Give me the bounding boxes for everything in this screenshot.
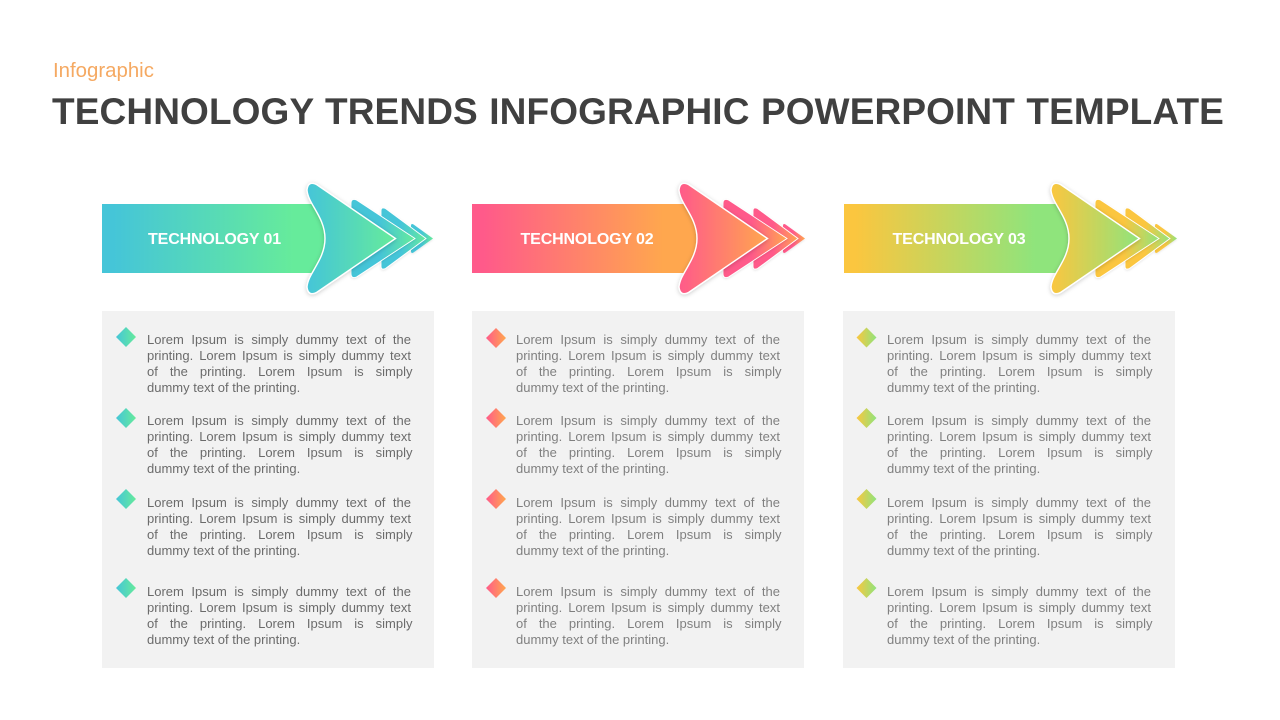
text: technology 03 item 4 [887,584,1152,647]
text: technology 01 item 2 [147,413,412,476]
eyebrow label: Infographic [53,60,154,82]
label: TECHNOLOGY 01 [148,231,281,248]
chevron 4 [411,224,433,253]
text: technology 02 item 4: Lorem Ipsum is simply dummy text of the [516,584,780,599]
arrow body [102,204,327,273]
text: technology 02 item 4 [516,584,782,647]
text: technology 03 item 2: of the printing. Lorem Ipsum is simply [887,445,1152,460]
chevrons and head [679,183,805,294]
text: technology 02 item 1: printing. Lorem Ipsum is simply dummy text [516,348,780,363]
text: technology 03 item 2: dummy text of the printing. [887,461,1040,476]
arrow body [844,204,1069,273]
text: technology 01 item 3: printing. Lorem Ipsum is simply dummy text [147,511,411,526]
label: TECHNOLOGY 02 [521,231,654,248]
text: technology 01 item 2: of the printing. Lorem Ipsum is simply [147,445,412,460]
text: technology 02 item 1: Lorem Ipsum is simply dummy text of the [516,332,780,347]
panel: technology 01 [102,311,434,668]
text: technology 01 item 4: printing. Lorem Ipsum is simply dummy text [147,600,411,615]
text: technology 01 item 4: of the printing. Lorem Ipsum is simply [147,616,412,631]
text: technology 02 item 2: Lorem Ipsum is simply dummy text of the [516,413,780,428]
text: technology 03 item 4: Lorem Ipsum is simply dummy text of the [887,584,1151,599]
chevrons and head [1051,183,1177,294]
diamond icons: technology 03 [856,328,876,598]
text: technology 02 item 2: dummy text of the printing. [516,461,669,476]
text: technology 02 item 3: of the printing. Lorem Ipsum is simply [516,527,782,542]
text: technology 01 item 3: dummy text of the printing. [147,543,300,558]
text: technology 03 item 3: dummy text of the printing. [887,543,1040,558]
text: technology 03 item 3: of the printing. Lorem Ipsum is simply [887,527,1152,542]
text: technology 01 item 1 [147,332,412,395]
text: technology 01 item 4 [147,584,412,647]
text: technology 03 item 1: of the printing. Lorem Ipsum is simply [887,364,1152,379]
text: technology 02 item 4: dummy text of the printing. [516,632,669,647]
text: technology 03 item 2 [887,413,1152,476]
text: technology 02 item 2: of the printing. Lorem Ipsum is simply [516,445,782,460]
diamond icons: technology 01 [116,327,136,598]
panel: technology 02 [472,311,804,668]
text: technology 03 item 1 [887,332,1152,395]
diamond icons: technology 02 [486,328,506,598]
text: technology 03 item 1: dummy text of the printing. [887,380,1040,395]
text: technology 01 item 1: dummy text of the printing. [147,380,300,395]
text: technology 03 item 3: Lorem Ipsum is simply dummy text of the [887,495,1151,510]
text: technology 03 item 2: Lorem Ipsum is simply dummy text of the [887,413,1151,428]
text: technology 02 item 1: of the printing. Lorem Ipsum is simply [516,364,782,379]
text: technology 01 item 4: dummy text of the printing. [147,632,300,647]
text: technology 02 item 4: of the printing. Lorem Ipsum is simply [516,616,782,631]
text: technology 01 item 2: printing. Lorem Ipsum is simply dummy text [147,429,411,444]
text: technology 02 item 2: printing. Lorem Ipsum is simply dummy text [516,429,780,444]
text: technology 03 item 4: of the printing. Lorem Ipsum is simply [887,616,1152,631]
text: technology 03 item 4: printing. Lorem Ipsum is simply dummy text [887,600,1151,615]
text: technology 02 item 2 [516,413,782,476]
arrow: technology 03 [844,183,1177,294]
text: technology 03 item 2: printing. Lorem Ipsum is simply dummy text [887,429,1151,444]
text: technology 02 item 3: dummy text of the printing. [516,543,669,558]
text: technology 03 item 3 [887,495,1152,558]
text: technology 01 item 2: Lorem Ipsum is simply dummy text of the [147,413,411,428]
arrow: technology 02 [472,183,805,294]
arrow body [472,204,697,273]
text: technology 01 item 4: Lorem Ipsum is simply dummy text of the [147,584,411,599]
text: technology 01 item 3: of the printing. Lorem Ipsum is simply [147,527,412,542]
text: technology 01 item 3 [147,495,412,558]
arrow: technology 01 [102,183,433,294]
text: technology 03 item 1: printing. Lorem Ipsum is simply dummy text [887,348,1151,363]
text: technology 02 item 1: dummy text of the printing. [516,380,669,395]
text: technology 01 item 1: Lorem Ipsum is simply dummy text of the [147,332,411,347]
chevron 2 [351,199,415,278]
text: technology 01 item 2: dummy text of the printing. [147,461,300,476]
text: technology 03 item 1: Lorem Ipsum is simply dummy text of the [887,332,1151,347]
label: TECHNOLOGY 03 [893,231,1026,248]
chevron head [307,183,396,294]
text: technology 01 item 3: Lorem Ipsum is simply dummy text of the [147,495,411,510]
text: technology 01 item 1: of the printing. Lorem Ipsum is simply [147,364,412,379]
text: technology 03 item 3: printing. Lorem Ipsum is simply dummy text [887,511,1151,526]
panel: technology 03 [843,311,1175,668]
text: technology 01 item 1: printing. Lorem Ipsum is simply dummy text [147,348,411,363]
text: technology 02 item 1 [516,332,782,395]
text: technology 02 item 3 [516,495,782,558]
text: technology 02 item 3: printing. Lorem Ipsum is simply dummy text [516,511,780,526]
text: technology 02 item 4: printing. Lorem Ipsum is simply dummy text [516,600,780,615]
chevron 3 [381,208,426,269]
text: technology 02 item 3: Lorem Ipsum is simply dummy text of the [516,495,780,510]
text: technology 03 item 4: dummy text of the printing. [887,632,1040,647]
title: TECHNOLOGY TRENDS INFOGRAPHIC POWERPOINT TEMPLATE [52,91,1224,132]
